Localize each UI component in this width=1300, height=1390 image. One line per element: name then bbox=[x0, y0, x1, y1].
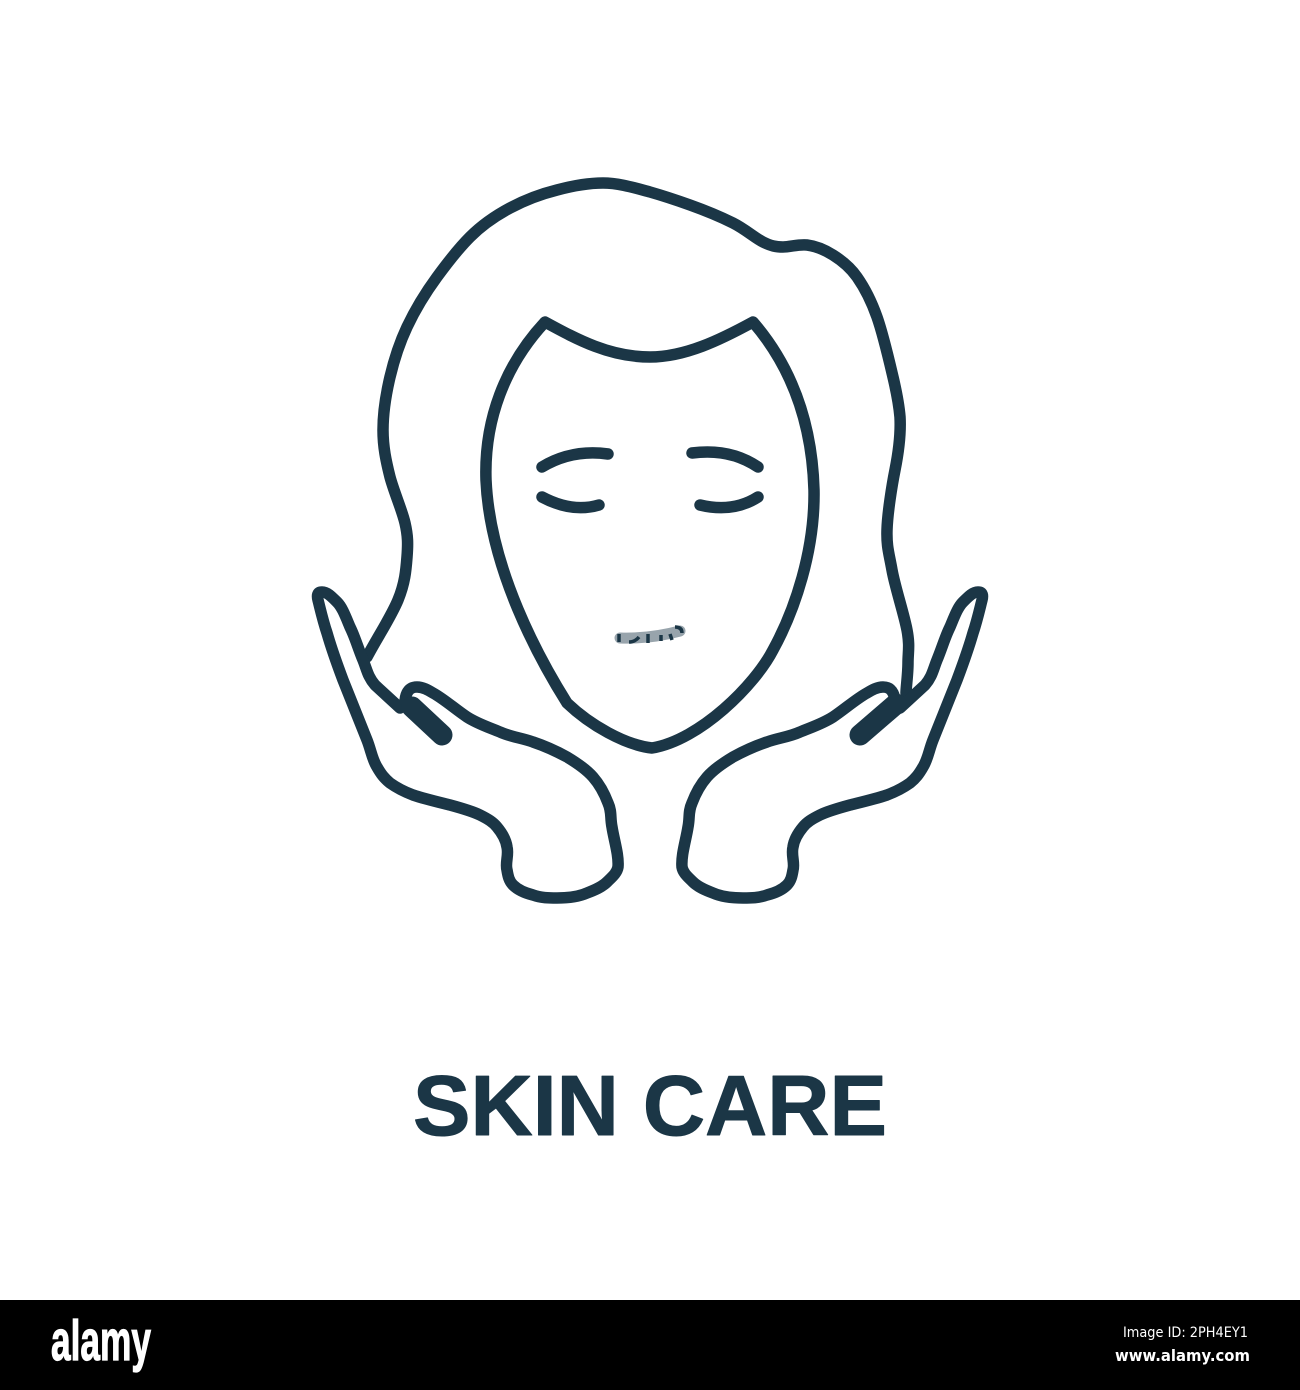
face outline bbox=[486, 322, 814, 748]
image id: Image ID: 2PH4EY1 bbox=[1123, 1325, 1248, 1341]
left eye bbox=[542, 453, 608, 508]
hair outline bbox=[367, 183, 909, 693]
title: SKIN CARE bbox=[413, 1059, 887, 1154]
mouth bbox=[619, 627, 682, 643]
right hand bbox=[682, 592, 983, 898]
right eye bbox=[692, 452, 758, 508]
alamy logo: alamy bbox=[51, 1309, 151, 1373]
left hand bbox=[317, 592, 618, 898]
footer bar bbox=[0, 1300, 1300, 1390]
icon: woman's face with caring hands bbox=[317, 183, 983, 898]
website: www.alamy.com bbox=[1115, 1346, 1250, 1365]
